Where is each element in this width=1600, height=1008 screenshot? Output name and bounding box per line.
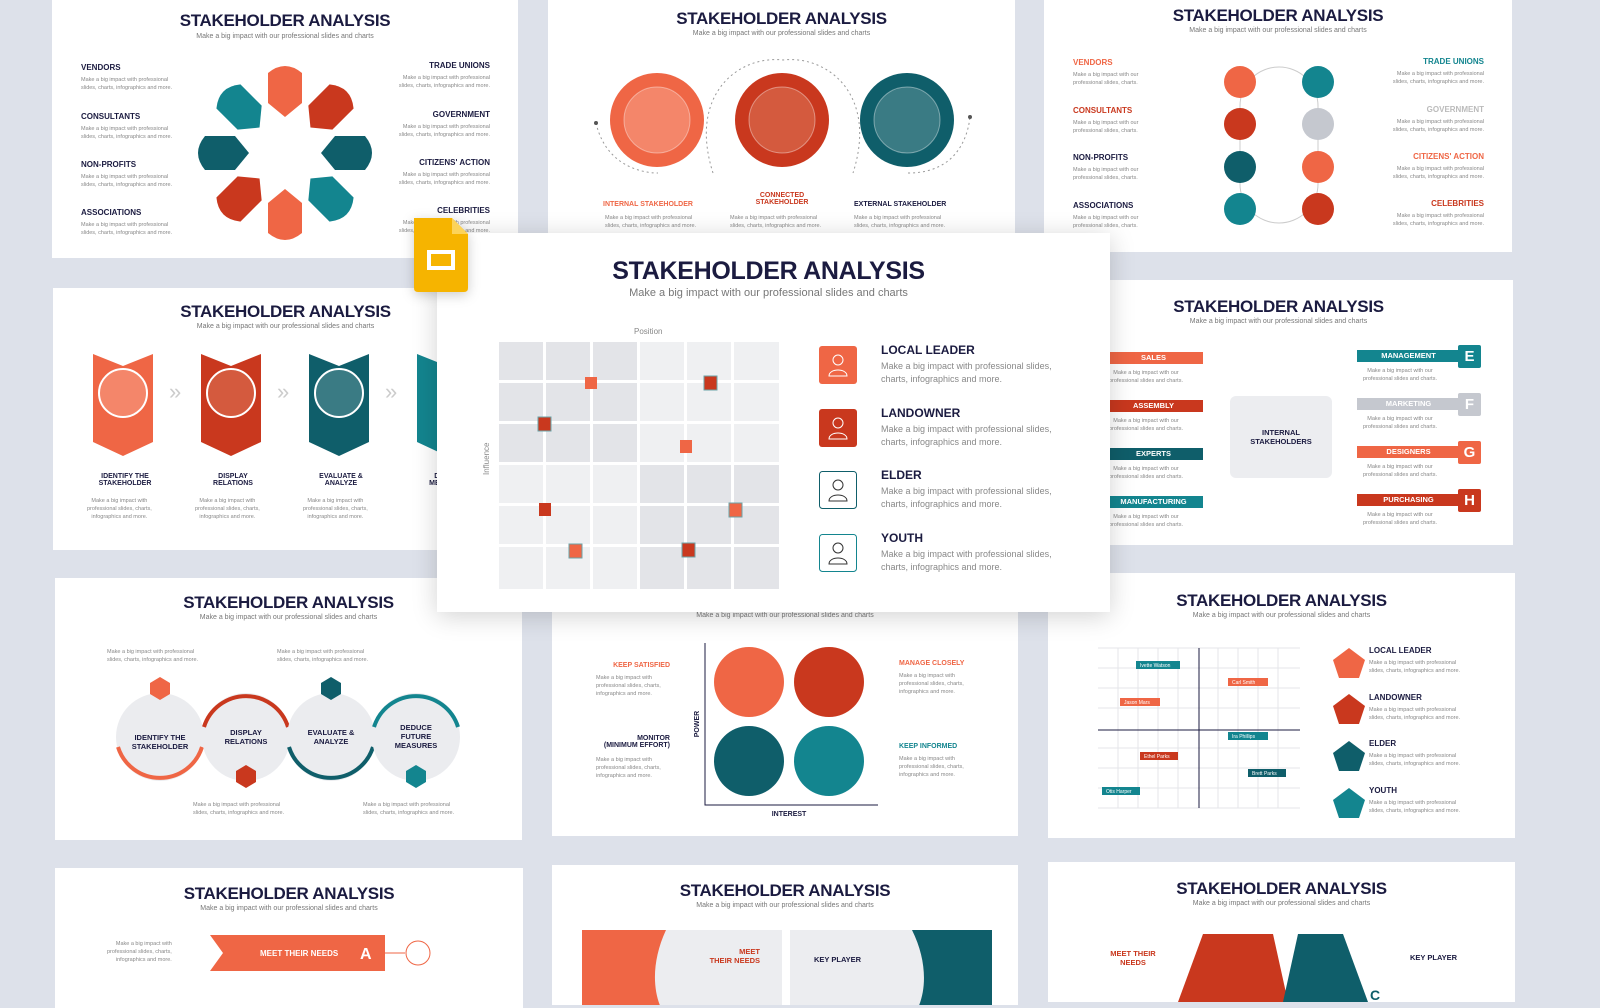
slide: internal stakeholders [1044,280,1513,545]
text: professional slides, charts, [107,949,172,955]
center box: STAKEHOLDERS [1250,437,1312,446]
banners [93,354,437,456]
right labels: Make a big impact with professional [1397,166,1484,172]
legend list: charts, infographics and more. [881,374,1002,384]
right bars: H [1464,492,1475,509]
circles diagram: DEDUCE [400,723,432,732]
step labels: IDENTIFY THE [101,473,149,480]
title: STAKEHOLDER ANALYSIS [184,884,394,903]
slide: flower stakeholders: Make a big impact with our professional slides and charts [196,33,374,40]
slide: process banners: Make a big impact with our professional slides and charts [197,323,374,330]
right bars: G [1464,444,1475,461]
step labels: infographics and more. [307,514,363,520]
center box [1230,396,1332,478]
right labels: slides, charts, infographics and more. [1393,221,1484,227]
right labels: Make a big impact with professional [1397,71,1484,77]
left labels: slides, charts, infographics and more. [81,230,172,236]
step labels: STAKEHOLDER [99,480,151,487]
title: STAKEHOLDER ANALYSIS [676,9,887,28]
left bars: Make a big impact with our [1113,514,1179,520]
slide: flower stakeholders [52,0,518,258]
slide: linked circles [55,578,522,840]
circles diagram: STAKEHOLDER [132,742,189,751]
subtitle: Make a big impact with our professional slides and charts [629,287,908,299]
title: STAKEHOLDER ANALYSIS [680,881,890,900]
quadrant labels: MANAGE CLOSELY [899,660,964,667]
legend list: Make a big impact with professional [1369,707,1456,713]
slide: arrow banners: Make a big impact with our professional slides and charts [200,905,378,912]
quadrant labels: professional slides, charts, [596,765,661,771]
circle labels: slides, charts, infographics and more. [854,223,945,229]
right labels: Make a big impact with professional [403,220,490,226]
map chart: Ethel Parks [1144,754,1170,760]
step labels: professional slides, charts, [195,506,260,512]
left labels: slides, charts, infographics and more. [81,182,172,188]
step labels: DEDUCE [434,473,464,480]
circles diagram: RELATIONS [225,737,267,746]
left labels: professional slides, charts. [1073,223,1138,229]
legend list: LOCAL LEADER [881,343,975,357]
chart: position vs influence grid: Influence [482,443,491,475]
circle labels: STAKEHOLDER [756,199,808,206]
right bars: MANAGEMENT [1381,351,1436,360]
right labels: Make a big impact with professional [1397,119,1484,125]
circle labels: EXTERNAL STAKEHOLDER [854,201,946,208]
slide: process banners [53,288,518,550]
quadrant labels: Make a big impact with [596,757,652,763]
slide: linked circles: Make a big impact with professional [277,649,364,655]
right bars: PURCHASING [1383,495,1434,504]
map chart: Jason Mars [1124,700,1150,706]
left labels: professional slides, charts. [1073,80,1138,86]
left labels [1073,58,1138,229]
quadrant labels: Make a big impact with [596,675,652,681]
slide: arrow banners [55,868,523,1008]
slide: ring of circles: Make a big impact with our professional slides and charts [1189,27,1367,34]
right bars: professional slides and charts. [1363,376,1437,382]
title: STAKEHOLDER ANALYSIS [1176,591,1387,610]
right bars: DESIGNERS [1386,447,1431,456]
step labels: Make a big impact with [307,498,363,504]
right labels: CELEBRITIES [1431,199,1484,208]
step labels: DISPLAY [218,473,248,480]
step labels: infographics and more. [91,514,147,520]
left labels: Make a big impact with our [1073,215,1138,221]
shapes: MEET THEIR [1110,949,1156,958]
right labels: slides, charts, infographics and more. [399,83,490,89]
matrix chart: INTEREST [772,811,807,818]
text: infographics and more. [116,957,172,963]
left bars: Make a big impact with our [1113,370,1179,376]
banner A: MEET THEIR NEEDS [260,949,339,958]
quadrant labels: KEEP INFORMED [899,743,957,750]
left labels: CONSULTANTS [1073,106,1132,115]
left labels: VENDORS [1073,58,1113,67]
left labels: professional slides, charts. [1073,175,1138,181]
right labels: slides, charts, infographics and more. [399,132,490,138]
circles diagram: DISPLAY [230,728,262,737]
left bars: EXPERTS [1136,449,1171,458]
left bars: Make a big impact with our [1113,418,1179,424]
slide: puzzle shapes [1048,862,1515,1002]
circles diagram [116,677,460,788]
step labels: Make a big impact with [91,498,147,504]
left labels: CONSULTANTS [81,112,140,121]
left bars: Make a big impact with our [1113,466,1179,472]
shapes: NEEDS [1120,958,1146,967]
bottom texts: Make a big impact with professional [193,802,280,808]
legend list: slides, charts, infographics and more. [1369,715,1460,721]
right bars: professional slides and charts. [1363,424,1437,430]
bottom texts: slides, charts, infographics and more. [193,810,284,816]
right labels: Make a big impact with professional [403,75,490,81]
circle labels: Make a big impact with professional [854,215,941,221]
map chart: Carl Smith [1232,680,1256,686]
legend list: YOUTH [881,531,923,545]
title: STAKEHOLDER ANALYSIS [612,257,925,285]
left labels: slides, charts, infographics and more. [81,85,172,91]
map chart: Brett Parks [1252,771,1277,777]
title: STAKEHOLDER ANALYSIS [1173,297,1384,316]
slide: power interest matrix [552,578,1018,836]
step labels: RELATIONS [213,480,253,487]
right bars: F [1465,396,1474,413]
right bars: professional slides and charts. [1363,472,1437,478]
left bars: professional slides and charts. [1109,474,1183,480]
icon: google slides [408,216,474,300]
left labels: slides, charts, infographics and more. [81,134,172,140]
left labels: NON-PROFITS [81,160,136,169]
title: STAKEHOLDER ANALYSIS [1176,879,1387,898]
right labels: Make a big impact with professional [403,124,490,130]
text [107,941,172,963]
slide: ring of circles [1044,0,1512,252]
step labels: professional slides, charts, [87,506,152,512]
flower diagram [198,66,372,240]
left bars: professional slides and charts. [1109,522,1183,528]
right labels: TRADE UNIONS [429,61,490,70]
legend list: ELDER [1369,739,1396,748]
slide: puzzle shapes: Make a big impact with our professional slides and charts [1193,900,1370,907]
left labels: Make a big impact with professional [81,222,168,228]
matrix chart: POWER [694,711,701,737]
step labels: Make a big impact with [199,498,255,504]
quadrant labels: professional slides, charts, [899,681,964,687]
step labels: MEASURES [429,480,469,487]
banner A: A [360,946,372,963]
right labels: slides, charts, infographics and more. [1393,174,1484,180]
text: Make a big impact with [116,941,172,947]
left labels: NON-PROFITS [1073,153,1128,162]
shapes: KEY PLAYER [1410,953,1458,962]
ring diagram [1224,66,1334,225]
circle labels [603,192,946,229]
left bars: SALES [1141,353,1166,362]
center box: INTERNAL [1262,428,1300,437]
right labels: CITIZENS' ACTION [1413,152,1484,161]
legend list: Make a big impact with professional slides, [881,424,1052,434]
circles diagram: FUTURE [401,732,431,741]
right labels [399,61,490,234]
slide: three circles: Make a big impact with our professional slides and charts [693,30,870,37]
circle labels: slides, charts, infographics and more. [605,223,696,229]
legend list: charts, infographics and more. [881,562,1002,572]
quadrant labels: professional slides, charts, [899,764,964,770]
top texts [107,649,198,663]
step labels: professional slides, charts, [303,506,368,512]
main slide: stakeholder map [437,233,1110,612]
legend list: LANDOWNER [881,406,960,420]
right bars: E [1464,348,1474,365]
left labels: VENDORS [81,63,121,72]
circle labels: Make a big impact with professional [605,215,692,221]
right bars: Make a big impact with our [1367,416,1433,422]
slide: linked circles: slides, charts, infographics and more. [363,810,454,816]
legend list: YOUTH [1369,786,1397,795]
right bars: professional slides and charts. [1363,520,1437,526]
circles diagram: IDENTIFY THE [134,733,186,742]
matrix chart [694,643,878,818]
quadrant labels: infographics and more. [596,773,652,779]
panels: MEET [739,947,760,956]
quadrant labels: infographics and more. [899,689,955,695]
right labels: slides, charts, infographics and more. [1393,127,1484,133]
left labels: ASSOCIATIONS [81,208,141,217]
right bars: MARKETING [1386,399,1431,408]
legend list: slides, charts, infographics and more. [1369,761,1460,767]
map chart: Ivette Watson [1140,663,1171,669]
right labels: TRADE UNIONS [1423,57,1484,66]
legend list: slides, charts, infographics and more. [1369,668,1460,674]
right labels: GOVERNMENT [1427,105,1484,114]
chart: position vs influence grid: Position [634,327,662,336]
legend list: Make a big impact with professional [1369,800,1456,806]
circles diagram: MEASURES [395,741,437,750]
quadrant labels: Make a big impact with [899,673,955,679]
quadrant labels: KEEP SATISFIED [613,662,670,669]
top texts: slides, charts, infographics and more. [107,657,198,663]
legend list: LANDOWNER [1369,693,1422,702]
quadrant labels: Make a big impact with [899,756,955,762]
banners: » [169,379,181,404]
top texts: Make a big impact with professional [107,649,194,655]
banners: » [385,379,397,404]
circle labels: CONNECTED [760,192,804,199]
right labels: slides, charts, infographics and more. [399,180,490,186]
title: STAKEHOLDER ANALYSIS [180,11,390,30]
left labels [81,63,172,236]
slide: key player panels [552,865,1018,1005]
circle labels: INTERNAL STAKEHOLDER [603,201,693,208]
left bars: professional slides and charts. [1109,426,1183,432]
bottom texts [193,802,284,816]
slide: power interest matrix: Make a big impact with our professional slides and charts [696,612,874,619]
left labels: professional slides, charts. [1073,128,1138,134]
legend list: Make a big impact with professional [1369,753,1456,759]
step labels [87,473,469,520]
map chart [1098,648,1300,808]
slide: internal stakeholders: Make a big impact with our professional slides and charts [1190,318,1367,325]
chart: position vs influence grid [482,327,779,589]
left labels: Make a big impact with our [1073,167,1138,173]
banners: » [277,379,289,404]
quadrant labels: infographics and more. [899,772,955,778]
quadrant labels: MONITOR [637,735,670,742]
slide: key player panels: Make a big impact with our professional slides and charts [696,902,874,909]
title: STAKEHOLDER ANALYSIS [1173,6,1383,25]
step labels: EVALUATE & [319,473,363,480]
slide: three circles [548,0,1015,248]
circle labels: Make a big impact with professional [730,215,817,221]
slide: linked circles: Make a big impact with professional [363,802,450,808]
slide: linked circles: Make a big impact with our professional slides and charts [200,614,377,621]
legend list [1333,646,1460,818]
legend list: Make a big impact with professional [1369,660,1456,666]
left labels: Make a big impact with professional [81,126,168,132]
left labels: Make a big impact with professional [81,174,168,180]
legend list: charts, infographics and more. [881,437,1002,447]
title: STAKEHOLDER ANALYSIS [180,302,391,321]
legend list: Make a big impact with professional slides, [881,361,1052,371]
right labels: Make a big impact with professional [403,172,490,178]
shapes [1110,934,1458,1002]
step labels: infographics and more. [199,514,255,520]
quadrant labels: infographics and more. [596,691,652,697]
title: STAKEHOLDER ANALYSIS [183,593,394,612]
legend list: slides, charts, infographics and more. [1369,808,1460,814]
legend list: ELDER [881,468,922,482]
circles diagram: ANALYZE [314,737,348,746]
legend list: LOCAL LEADER [1369,646,1432,655]
left labels: Make a big impact with professional [81,77,168,83]
circles diagram: EVALUATE & [308,728,355,737]
map chart: Ira Phillips [1232,734,1256,740]
right labels [1393,57,1484,227]
legend list: Make a big impact with professional slides, [881,486,1052,496]
panels: THEIR NEEDS [710,956,760,965]
legend list: charts, infographics and more. [881,499,1002,509]
left labels: Make a big impact with our [1073,120,1138,126]
icon: local leader [819,346,857,384]
panels [582,930,992,1005]
icon: landowner [819,409,857,447]
legend list: Make a big impact with professional slides, [881,549,1052,559]
circle labels: slides, charts, infographics and more. [730,223,821,229]
map chart: Otis Harper [1106,789,1132,795]
left bars: professional slides and charts. [1109,378,1183,384]
slide: linked circles: slides, charts, infographics and more. [277,657,368,663]
right labels: GOVERNMENT [433,110,490,119]
left labels: ASSOCIATIONS [1073,201,1133,210]
legend list [819,343,1052,572]
left bars: MANUFACTURING [1120,497,1187,506]
right labels: Make a big impact with professional [1397,213,1484,219]
right labels: CITIZENS' ACTION [419,158,490,167]
circles diagram [594,59,972,174]
right labels: slides, charts, infographics and more. [399,228,490,234]
right bars [1357,345,1481,526]
icon: elder [819,471,857,509]
icon: youth [819,534,857,572]
left bars [1109,352,1203,528]
slide: position influence map [1048,573,1515,838]
right bars: Make a big impact with our [1367,464,1433,470]
right bars: Make a big impact with our [1367,512,1433,518]
right bars: Make a big impact with our [1367,368,1433,374]
banner A [210,935,430,971]
left bars: ASSEMBLY [1133,401,1174,410]
right labels: CELEBRITIES [437,206,490,215]
panels: KEY PLAYER [814,955,862,964]
right labels: slides, charts, infographics and more. [1393,79,1484,85]
quadrant labels: (MINIMUM EFFORT) [604,742,670,749]
step labels: ANALYZE [325,480,357,487]
quadrant labels: professional slides, charts, [596,683,661,689]
slide: position influence map: Make a big impact with our professional slides and charts [1193,612,1370,619]
left labels: Make a big impact with our [1073,72,1138,78]
quadrant labels [596,660,964,779]
